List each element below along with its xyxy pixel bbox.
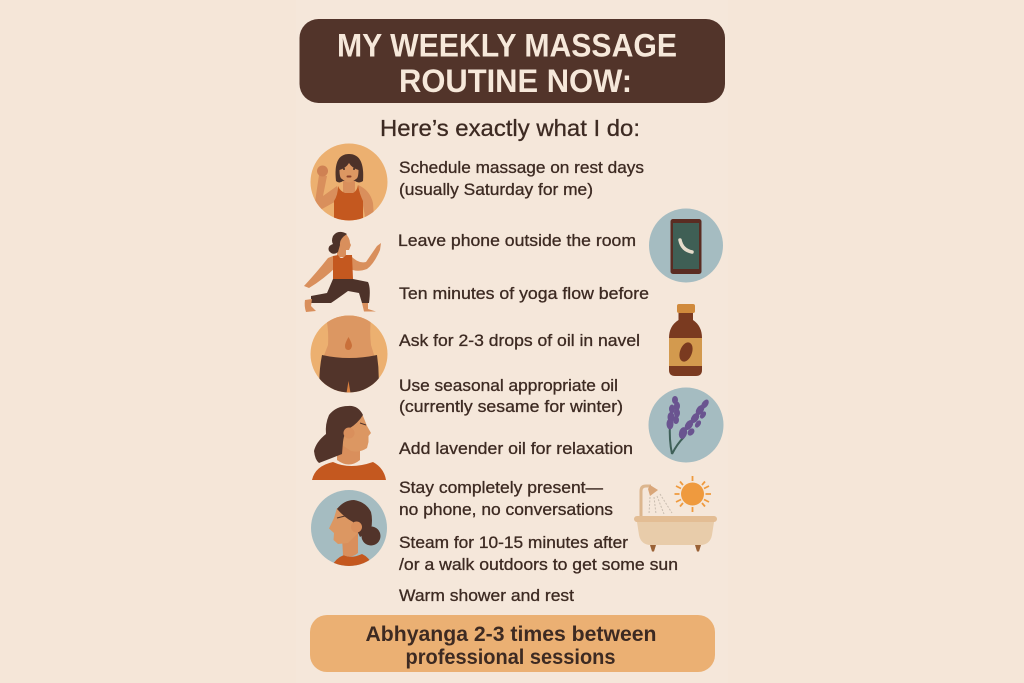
footer callout: Abhyanga 2-3 times between [366, 623, 656, 646]
step: navel oil: Ask for 2-3 drops of oil in navel [399, 332, 640, 350]
footer callout [310, 615, 715, 672]
sun [674, 476, 711, 512]
icon: oil bottle [669, 304, 702, 376]
step: seasonal oil [399, 377, 623, 416]
step: steam [399, 534, 678, 574]
step: lavender: Add lavender oil for relaxation [399, 440, 633, 458]
step: seasonal oil: Use seasonal appropriate oil [399, 377, 618, 395]
step: yoga: Ten minutes of yoga flow before [399, 285, 649, 303]
step: leave phone: Leave phone outside the room [398, 232, 636, 250]
tub [634, 516, 717, 522]
title banner: ROUTINE NOW: [399, 63, 632, 99]
shower [641, 486, 651, 517]
step: stay present: Stay completely present— [399, 479, 604, 497]
icon: woman with bun, side profile [311, 490, 387, 566]
step: schedule massage [399, 159, 644, 199]
step: schedule massage: Schedule massage on rest days [399, 159, 644, 177]
icon: lavender in circle [648, 388, 724, 462]
icon: woman raising fist [310, 144, 388, 222]
step: steam: /or a walk outdoors to get some sun [399, 556, 678, 574]
step: schedule massage: (usually Saturday for me) [399, 181, 593, 199]
icon: phone in circle [649, 208, 723, 282]
step: stay present: no phone, no conversations [399, 501, 613, 519]
icon: bathtub with shower and sun [634, 476, 717, 552]
icon: woman with long hair, side profile [312, 406, 386, 480]
step: seasonal oil: (currently sesame for winter) [399, 398, 623, 416]
icon: yoga lunge figure [304, 232, 381, 312]
subheading: Here’s exactly what I do: [380, 115, 640, 141]
icon: abdomen with navel [310, 312, 388, 395]
step: shower: Warm shower and rest [399, 587, 574, 605]
step list [398, 159, 678, 605]
footer callout: professional sessions [406, 646, 616, 669]
title banner: MY WEEKLY MASSAGE [337, 28, 677, 64]
title banner [300, 19, 725, 103]
step: steam: Steam for 10-15 minutes after [399, 534, 629, 552]
step: stay present [399, 479, 613, 519]
